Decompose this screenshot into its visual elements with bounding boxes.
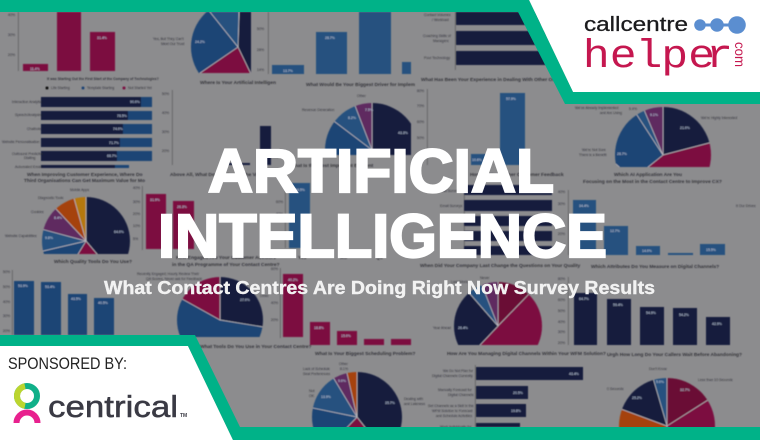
horizontal bar chart: other organisations: Coaching Skills of: [423, 34, 451, 38]
pie labels: AI application: Focusing on the Most in the Contact Centre to Improve CX?: [583, 179, 722, 185]
logo icon: connected circles: [694, 16, 746, 34]
pie labels: AI application: We're Not Sure: [582, 148, 606, 152]
title: ARTIFICIAL: [208, 137, 554, 205]
bar chart: quality results: 53.9%: [18, 284, 29, 288]
bar chart: attributes on digital channels: It Our Drives: [736, 204, 756, 208]
bar chart: scheduling problem: 40.2%: [288, 278, 299, 282]
bar chart: quality results: 50%: [3, 270, 10, 274]
horizontal bar chart: quality survey questions: [420, 185, 581, 269]
pie labels: AI application: 5.4%: [629, 107, 637, 111]
horizontal bar chart: quality survey questions: When Did Your Company Last Change the Questions on Your Quality: [420, 263, 581, 269]
stacked horizontal bar chart: [2, 97, 152, 184]
pie labels: scheduling: Lack of Schedule: [303, 367, 330, 371]
bar chart: attributes on digital channels: 20%: [558, 232, 565, 236]
bar chart: quality results: 43.5%: [71, 297, 82, 301]
pie labels: most important element: 8.2%: [348, 116, 357, 120]
pie labels: contact centre usage: [137, 272, 312, 350]
pie labels: quality tools: Which Quality Tools Do You Use?: [54, 259, 132, 265]
bar chart: centre column: 60%: [276, 200, 283, 204]
stacked horizontal bar chart: Interaction Analytics: [12, 100, 43, 104]
bar chart: scheduling problem: [271, 267, 415, 357]
pie labels: most important element: 43.3%: [398, 131, 409, 135]
bar chart: above all: [162, 90, 271, 178]
pie labels: abandon time: Don't Know: [649, 367, 667, 371]
horizontal bar chart: other organisations: [421, 12, 563, 83]
bar chart: biggest driver: 28.7%: [325, 36, 336, 40]
bar chart: technology start: 30%: [8, 33, 15, 37]
bar chart: technology start: 11.4%: [30, 67, 41, 71]
bar chart: technology start: Not Started Yet: [128, 86, 152, 90]
pie labels: abandon time: 0 Seconds: [607, 387, 624, 391]
stacked horizontal bar chart: Website Personalisation: [2, 140, 40, 144]
horizontal bar chart: WFM digital channels: 20.5%: [513, 391, 524, 395]
bar chart: scheduling problem: 15.0%: [341, 334, 352, 338]
bar chart: centre column: Qu: [376, 255, 383, 261]
pie labels: most important element: Revenue Generation: [302, 108, 334, 112]
pie labels: AI application: There is a Benefit: [579, 153, 606, 157]
pie labels: scheduling: Not: [309, 389, 314, 393]
horizontal bar chart: other organisations: Managers: [433, 39, 449, 43]
pie labels: abandon time: 5.0%: [656, 380, 665, 384]
chart captions: digital channels and abandon time: Urgh How Long Do Your Callers Wait Before Abandoning?: [607, 352, 742, 358]
pie chart: digital channel change: [453, 281, 543, 346]
bar chart: scheduling problem: 40%: [271, 301, 278, 305]
horizontal bar chart: quality survey questions: Email Surveys: [440, 204, 463, 208]
wordmark: centrical: [48, 389, 178, 424]
bar chart: technology start: It was Starting Out the First Start of the Company of Technologies?: [47, 77, 159, 81]
subtitle: What Contact Centres Are Doing Right Now Survey Results: [104, 278, 655, 298]
pie labels: contact centre usage: 27.0%: [240, 298, 251, 302]
bar chart: customer feedback: 70%: [417, 104, 424, 108]
bar chart: quality results: 40.5%: [98, 301, 109, 305]
bar chart: digital channels results: [558, 277, 730, 345]
pie labels: AI application: 21.0%: [680, 126, 691, 130]
top right white logo panel: [529, 0, 760, 92]
bar chart: biggest driver: 13.7%: [283, 69, 294, 73]
bar chart: biggest driver: 50%: [257, 27, 264, 31]
bar chart: attributes on digital channels: 34.4%: [579, 204, 590, 208]
bar chart: centre column: Mo: [340, 255, 347, 261]
bar chart: technology start: 20%: [8, 53, 15, 57]
pie chart: abandon time: [618, 377, 716, 427]
pie labels: quality tools: Diagnostic Tools: [38, 196, 64, 200]
bar chart: above all: 50%: [162, 92, 169, 96]
bar chart: digital channels results: 50%: [558, 309, 565, 313]
pie labels: contact centre usage: QA Scores, Never ask for Feedback: [146, 277, 202, 281]
pie labels: digital channel change: Year Ahead: [433, 326, 451, 330]
horizontal bar chart: WFM digital channels: and Schedule Activities: [436, 414, 472, 418]
bar chart: biggest driver: 28%: [257, 48, 264, 52]
pie labels: contact centre usage: Recently Engaged; Hourly Review Their: [137, 272, 200, 276]
bar chart: customer engagement: 20%: [133, 212, 140, 216]
icon: centrical figure: [16, 386, 38, 423]
horizontal bar chart: WFM digital channels: We Do Not Plan for: [443, 369, 474, 373]
pie labels: AI application: 28.7%: [617, 152, 628, 156]
bar chart: attributes on digital channels: 30%: [558, 202, 565, 206]
pie labels: quality tools: Mobile Apps: [70, 188, 89, 192]
horizontal bar chart: other organisations: What Has Been Your Experience in Dealing With Other Organ: [421, 77, 563, 83]
pie chart: scheduling: [311, 371, 403, 427]
bar chart: scheduling problem: 20%: [271, 318, 278, 322]
bar chart: centre column: [276, 183, 383, 261]
sponsor heading: SPONSORED BY:: [8, 355, 127, 373]
pie labels: AI application: 9.1%: [650, 113, 659, 117]
horizontal bar chart: quality survey questions: Email Surveys: [438, 189, 461, 193]
logo word: com: com: [732, 42, 748, 67]
stacked horizontal bar chart: 78.5%: [117, 114, 128, 118]
stacked horizontal bar chart: 68.7%: [107, 154, 118, 158]
title: [158, 137, 607, 270]
bar chart: quality results: 50%: [3, 285, 10, 289]
bar chart: customer engagement: How Engaged Are Your Customer Advisors: [176, 255, 276, 261]
bar chart: customer feedback: How Do You Gather Customer Feedback: [470, 172, 564, 178]
horizontal bar chart: WFM digital channels: Manually Forecast for: [438, 388, 472, 392]
bar chart: technology start: Template Starting: [87, 86, 114, 90]
pie labels: scheduling: 9.0%: [338, 379, 347, 383]
pie labels: scheduling: 35.7%: [385, 401, 396, 405]
pie labels: abandon time: 32.7%: [680, 388, 691, 392]
bar chart: above all: 30%: [162, 130, 169, 134]
horizontal bar chart: WFM digital channels: Work Individually for: [440, 425, 472, 429]
chart captions: digital channels and abandon time: How Are You Managing Digital Channels Within Your WFM Solution?: [447, 351, 606, 357]
horizontal bar chart: other organisations: Poor Technology: [424, 56, 450, 60]
stacked horizontal bar chart: 74.0%: [113, 127, 124, 131]
bottom green band: [0, 335, 760, 440]
bar chart: attributes on digital channels: 40%: [558, 190, 565, 194]
bar chart: customer engagement: [133, 186, 280, 268]
bar chart: customer feedback: 10.6%: [472, 158, 483, 162]
bar chart: attributes on digital channels: 12.7%: [610, 229, 621, 233]
pie chart: AI application: [614, 106, 712, 168]
title: INTELLIGENCE: [158, 202, 607, 270]
pie labels: most important element: [290, 94, 409, 169]
bar chart: above all: 40%: [162, 111, 169, 115]
bar chart: digital channels results: 40%: [558, 320, 565, 324]
bar chart: digital channels results: 42.9%: [712, 322, 723, 326]
bar chart: digital channels results: 20%: [558, 341, 565, 345]
logo word: callcentre: callcentre: [584, 14, 688, 36]
pie labels: quality tools: 9.8%: [45, 236, 54, 240]
stacked horizontal bar chart: When Improving Customer Experience, Where Do: [27, 172, 143, 178]
pie labels: digital channel change: 26.4%: [458, 326, 469, 330]
bar chart: customer feedback: [417, 89, 564, 178]
pie labels: quality tools: 8.4%: [54, 216, 63, 220]
horizontal bar chart: other organisations: Contact Volumes: [424, 13, 451, 17]
horizontal bar chart: WFM digital channels: Set Channels as a Skill in the: [428, 404, 474, 408]
bar chart: digital channels results: 60%: [558, 298, 565, 302]
stacked horizontal bar chart: 90.0%: [130, 100, 141, 104]
bar chart: digital channels results: 54.2%: [679, 313, 690, 317]
pie labels: most important element: 7.5%: [365, 108, 374, 112]
bar chart: biggest driver: 14%: [257, 68, 264, 72]
pie labels: abandon time: [607, 367, 733, 400]
pie labels: scheduling: Other: [339, 362, 349, 366]
trademark: TM: [180, 413, 187, 419]
bar chart: quality results: 30%: [3, 314, 10, 318]
bar chart: quality results: 20%: [3, 329, 10, 333]
stacked horizontal bar chart: Speech/Analysing: [15, 113, 43, 117]
horizontal bar chart: WFM digital channels: Digital Channels Currently: [432, 374, 473, 378]
stacked horizontal bar chart: Third Organisations Can Get Maximum Value for Mo: [24, 178, 145, 184]
bar chart: digital channels results: 54.9%: [646, 311, 657, 315]
pie labels: scheduling: and Lateness: [404, 402, 425, 406]
bar chart: quality results: 40%: [3, 300, 10, 304]
pie labels: AI application: Which AI Application Are You: [614, 172, 682, 178]
pie labels: artificial intelligence: Meet Our Trust: [161, 42, 184, 46]
stacked horizontal bar chart: Automated Emails: [15, 165, 44, 169]
sponsor logo: centrical: [16, 386, 187, 424]
top green band: [0, 0, 760, 104]
pie labels: abandon time: Less than 10 Seconds: [698, 378, 733, 382]
bar chart: biggest driver: [257, 12, 416, 88]
logo word: helper: helper: [583, 34, 733, 79]
bar chart: customer feedback: 57.9%: [506, 97, 517, 101]
pie labels: most important element: What Is the Most Important Element: [290, 163, 374, 169]
bar chart: quality results: [3, 270, 114, 335]
pie labels: quality tools: Cookies: [31, 210, 44, 214]
pie labels: quality tools: Website Capabilities: [5, 234, 37, 238]
bar chart: customer feedback: 50%: [417, 136, 424, 140]
bar chart: digital channels results: 59.4%: [613, 303, 624, 307]
pie labels: abandon time: 25.2%: [632, 396, 643, 400]
bar chart: digital channels results: 80%: [558, 277, 565, 281]
bar chart: customer engagement: 26.3%: [177, 205, 188, 209]
pie labels: scheduling: [303, 362, 425, 406]
pie chart: contact centre usage: [176, 276, 264, 338]
bar chart: technology start: 40%: [8, 13, 15, 17]
bar chart: scheduling problem: What Is Your Biggest Scheduling Problem?: [315, 351, 415, 357]
pie labels: digital channel change: Last Week: [451, 280, 468, 284]
pie labels: artificial intelligence: 24.2%: [195, 40, 206, 44]
horizontal bar chart: WFM digital channels: 43.4%: [569, 372, 580, 376]
pie labels: scheduling: Seat Preferences: [303, 372, 330, 376]
stacked horizontal bar chart: 71.7%: [109, 141, 120, 145]
pie labels: quality tools: [5, 188, 132, 265]
pie labels: scheduling: Dealing with: [404, 397, 423, 401]
bar chart: customer feedback: 80%: [417, 89, 424, 93]
bar chart: scheduling problem: 60%: [271, 267, 278, 271]
pie labels: scheduling: OK: [309, 394, 315, 398]
bar chart: above all: Above All, What Do You See As the Value: [170, 172, 266, 178]
bottom left white sponsor panel: [0, 346, 233, 440]
bar chart: technology start: 31.4%: [97, 36, 108, 40]
bar chart: customer engagement: 31.9%: [150, 198, 161, 202]
bar chart: customer engagement: 10%: [133, 224, 140, 228]
bar chart: customer engagement: in the QA Programme of Your Contact Centre?: [172, 262, 280, 268]
horizontal bar chart: other organisations: / Workload: [432, 18, 449, 22]
bar chart: technology start: [8, 12, 159, 90]
horizontal bar chart: WFM digital channels: 19.8%: [511, 409, 522, 413]
pie labels: AI application: [575, 106, 737, 185]
pie labels: scheduling: 13.9%: [321, 395, 332, 399]
bar chart: centre column: Yes: [298, 255, 307, 261]
bar chart: centre column: 40%: [276, 212, 283, 216]
pie labels: contact centre usage: What Tools Do You Use in Your Contact Centre?: [200, 344, 312, 350]
bar chart: customer engagement: 40%: [133, 186, 140, 190]
chart captions: digital channels and abandon time: [447, 351, 742, 358]
pie chart: most important element: [324, 102, 412, 156]
pie labels: digital channel change: [433, 276, 490, 330]
bar chart: technology start: Life Starting: [51, 86, 70, 90]
horizontal bar chart: WFM digital channels: [428, 365, 583, 429]
horizontal bar chart: WFM digital channels: WFM Solution to Forecast: [432, 409, 472, 413]
horizontal bar chart: WFM digital channels: Digital Channels: [448, 393, 474, 397]
pie chart: quality tools: [41, 196, 131, 255]
bar chart: customer engagement: 5%: [133, 237, 138, 241]
bar chart: customer engagement: 30%: [133, 200, 140, 204]
stacked horizontal bar chart: Chatbots: [27, 127, 41, 131]
bar chart: attributes on digital channels: Which Attributes Do You Measure on Digital Channels?: [591, 264, 719, 270]
pie labels: scheduling: 8.1%: [340, 367, 348, 371]
pie labels: artificial intelligence: [153, 37, 276, 86]
bar chart: attributes on digital channels: 14.0%: [642, 249, 653, 253]
bar chart: scheduling problem: 18.8%: [314, 326, 325, 330]
pie labels: contact centre usage: Other: [260, 294, 270, 298]
stacked horizontal bar chart: Outbound Predictive: [12, 152, 44, 156]
bar chart: attributes on digital channels: 10%: [558, 243, 565, 247]
bar chart: quality results: 53.4%: [45, 285, 56, 289]
bar chart: above all: 20%: [162, 149, 169, 153]
bar chart: attributes on digital channels: 15.5%: [706, 248, 717, 252]
pie labels: digital channel change: Never: [480, 276, 490, 280]
pie chart: artificial intelligence: [190, 12, 252, 74]
stacked horizontal bar chart: Dialling: [24, 156, 36, 160]
pie labels: artificial intelligence: Where Is Your Artificial Intelligen: [200, 80, 276, 86]
bar chart: digital channels results: 30%: [558, 330, 565, 334]
bar chart: digital channels results: 64.7%: [579, 297, 590, 301]
bar chart: attributes on digital channels: [558, 190, 756, 270]
bar chart: customer feedback: 60%: [417, 120, 424, 124]
pie labels: artificial intelligence: Yes, But They Can't: [153, 37, 184, 41]
logo: callcentre helper: [583, 14, 748, 79]
bar chart: biggest driver: What Would Be Your Biggest Driver for Implem: [306, 82, 416, 88]
pie labels: AI application: We're Highly Interested: [701, 116, 737, 120]
pie labels: AI application: and Are Using: [600, 111, 622, 115]
pie labels: quality tools: 64.0%: [114, 230, 125, 234]
pie labels: AI application: We've Already Implemented: [575, 106, 618, 110]
pie labels: most important element: Other: [357, 94, 367, 98]
bar chart: centre column: 34.5%: [295, 188, 306, 192]
